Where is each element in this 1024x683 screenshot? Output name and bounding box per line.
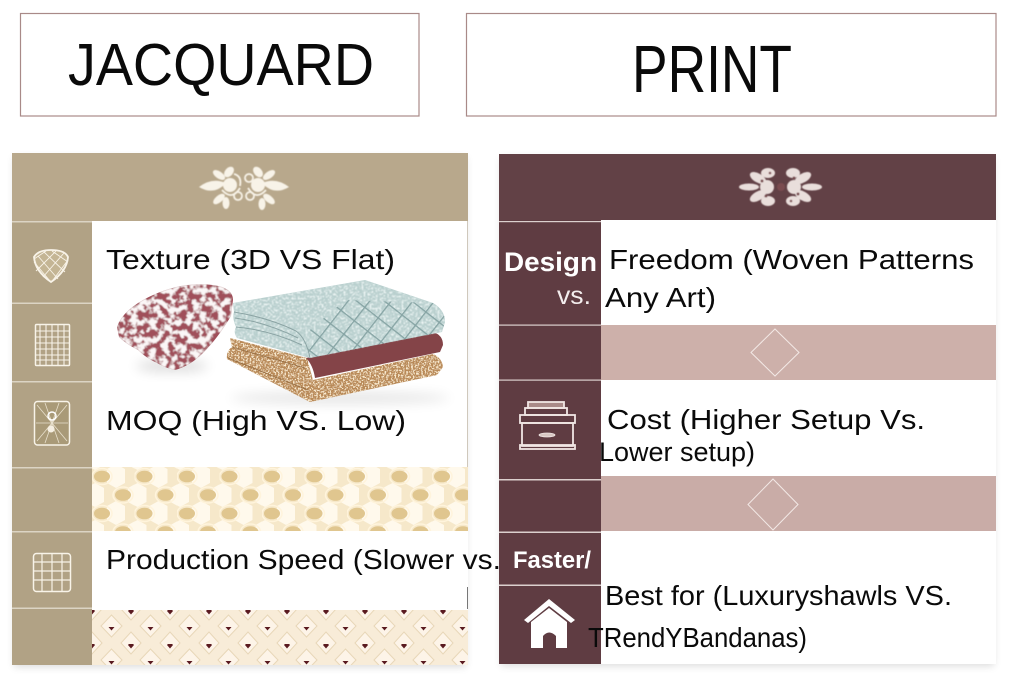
fabric: red floral roll (117, 284, 233, 370)
row text: Cost line 2: Lower setup) (599, 437, 755, 467)
pattern band: circles (92, 467, 468, 531)
icon: diamond 1 (751, 329, 799, 376)
icon: starburst card (34, 402, 70, 445)
icon: grid weave (35, 324, 70, 366)
row text: Best for line 1: Best for (Luxuryshawls VS. (605, 580, 952, 611)
pink band 1 (601, 325, 996, 380)
bold label: Faster: Faster/ (513, 547, 591, 574)
row text: MOQ: MOQ (High VS. Low) (106, 405, 406, 436)
panel header: Jacquard (12, 153, 468, 221)
icon: drawer chest (520, 402, 575, 449)
bold label: Design: Design (504, 247, 597, 277)
fabric photo (117, 280, 450, 404)
icon column: Print (499, 220, 601, 664)
row text: Freedom line 2: Any Art) (605, 282, 716, 313)
icon: grid (33, 553, 71, 592)
title: Jacquard: JACQUARD (68, 32, 374, 98)
icon: house (524, 599, 575, 648)
label: vs.: vs. (557, 282, 591, 310)
panel: Jacquard (12, 153, 468, 667)
panel header: Print (499, 154, 996, 220)
ornament: floral Jacquard (199, 165, 289, 210)
fabric: gold stack (227, 338, 443, 402)
row text: Production Speed: Production Speed (Slower vs. (106, 544, 501, 575)
row text: Best for line 2: TRendYBandanas) (588, 622, 807, 653)
ornament: floral Print (739, 168, 822, 206)
pink band 2 (601, 476, 996, 531)
title box: Jacquard (20, 14, 419, 116)
row text: Texture: Texture (3D VS Flat) (106, 244, 395, 275)
icon: diamond 2 (748, 479, 798, 530)
row divider accent (467, 587, 468, 609)
title box: Print (466, 14, 996, 116)
title: Print: PRINT (632, 32, 792, 107)
fabric: maroon layer (306, 332, 443, 378)
row text: Freedom line 1: Freedom (Woven Patterns (609, 244, 974, 275)
pattern band: diamonds (92, 610, 468, 665)
row text: Cost line 1: Cost (Higher Setup Vs. (607, 404, 925, 435)
icon column: Jacquard (12, 221, 92, 665)
icon: woven mesh shield (34, 250, 68, 282)
panel: Print (499, 154, 996, 666)
fabric: teal quilted blanket (233, 280, 445, 358)
